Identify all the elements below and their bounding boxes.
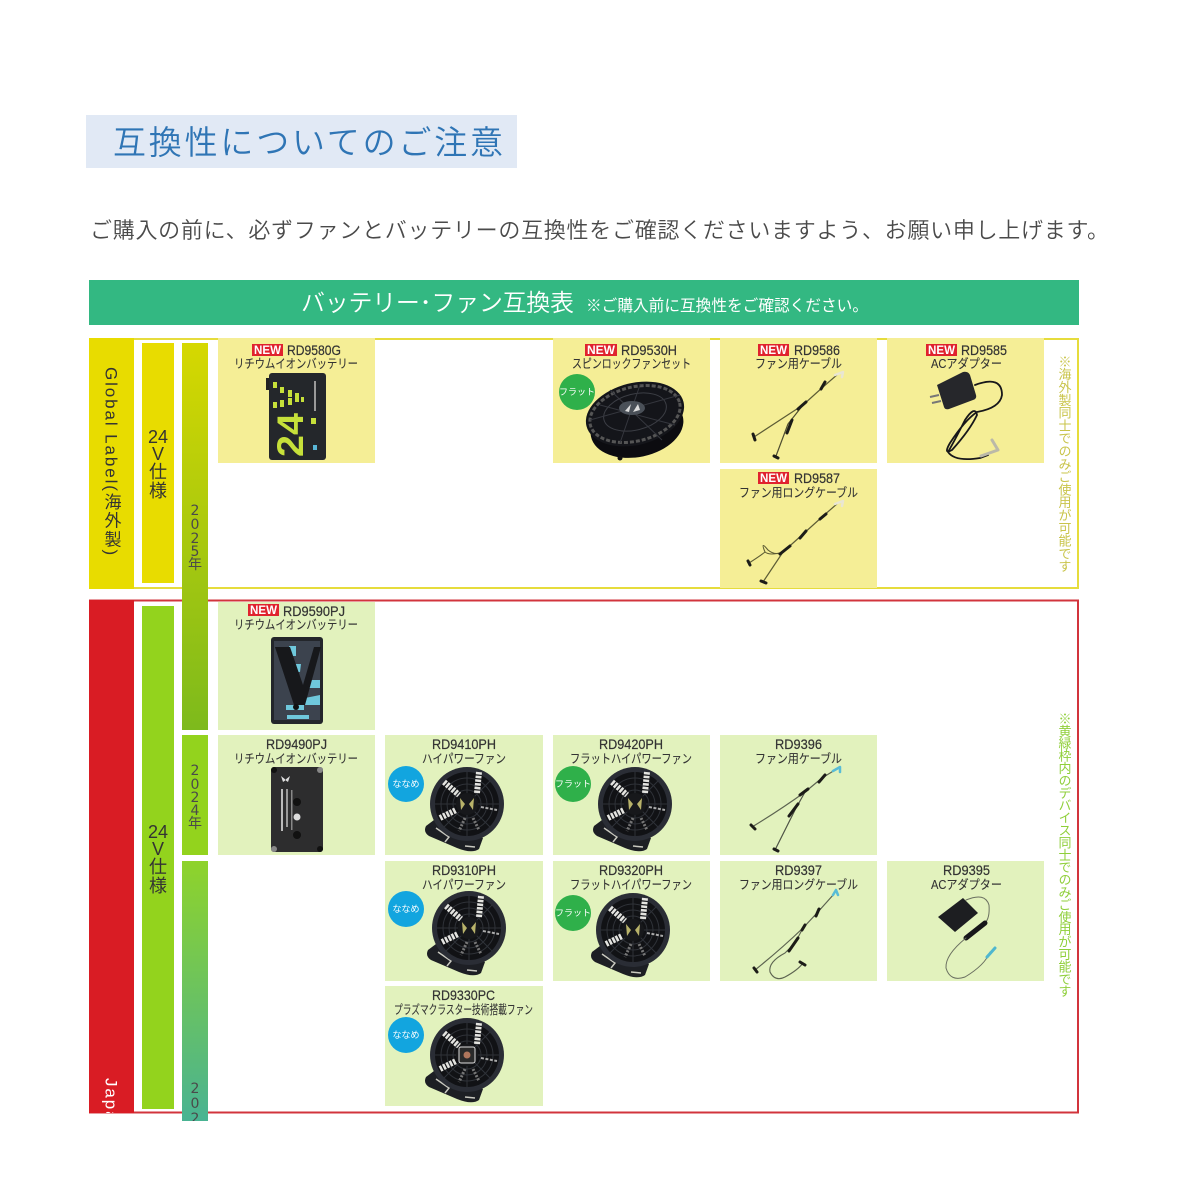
panel: global label frame: Global Label(海外製) — [102, 367, 121, 557]
badge: diagonal: ななめ — [392, 1030, 420, 1040]
icon: long cable — [754, 890, 838, 979]
card: RD9310PH — [385, 861, 543, 981]
card: RD9397 — [720, 861, 877, 981]
card: RD9580G — [218, 338, 375, 463]
icon: long cable — [748, 501, 843, 583]
card: RD9490PJ: RD9490PJ — [266, 736, 327, 752]
card: RD9397: ファン用ロングケーブル — [739, 877, 858, 892]
icon: fan — [425, 767, 504, 851]
card: RD9590PJ: リチウムイオンバッテリー — [234, 618, 358, 632]
card: RD9580G: NEW — [254, 345, 281, 357]
card: RD9395: RD9395 — [943, 862, 990, 878]
card: RD9590PJ: NEW — [250, 605, 277, 617]
card: RD9320PH: RD9320PH — [599, 862, 663, 878]
card: RD9587: RD9587 — [794, 470, 840, 486]
voltage column: global 24V: 仕 — [149, 462, 167, 482]
intro text: ご購入の前に、必ずファンとバッテリーの互換性をご確認くださいますよう、お願い申し上げます。 — [90, 218, 1109, 243]
card: RD9580G: リチウムイオンバッテリー — [234, 357, 358, 371]
card: RD9420PH: RD9420PH — [599, 736, 663, 752]
card: RD9420PH: フラットハイパワーファン — [570, 752, 692, 766]
badge: flat — [555, 766, 591, 802]
card: RD9580G: RD9580G — [287, 342, 341, 358]
badge: flat — [559, 374, 595, 410]
card: RD9310PH: RD9310PH — [432, 862, 496, 878]
card: RD9330PC — [385, 986, 543, 1106]
card: RD9586: RD9586 — [794, 342, 840, 358]
card: RD9585: RD9585 — [961, 342, 1007, 358]
card: RD9396: ファン用ケーブル — [755, 751, 842, 766]
panel: japan label frame: Japan — [102, 1078, 120, 1134]
icon: cable — [753, 372, 843, 458]
card: RD9530H — [553, 338, 710, 466]
icon: battery 24V: 24 — [270, 413, 311, 457]
badge: diagonal: ななめ — [392, 779, 420, 789]
card: RD9330PC: プラズマクラスター技術搭載ファン — [394, 1002, 533, 1017]
card: RD9397: RD9397 — [775, 862, 822, 878]
card: RD9395 — [887, 861, 1044, 981]
badge: flat — [555, 895, 591, 931]
title — [86, 115, 517, 168]
icon: fan — [593, 767, 672, 851]
card: RD9587: NEW — [760, 473, 787, 485]
note: global: ※海外製同士でのみご使用が可能です — [1056, 355, 1072, 573]
badge: diagonal — [388, 891, 424, 927]
year column: 2024: 2024年 — [188, 763, 202, 832]
year column: 2025 — [182, 343, 208, 730]
year column: 2025: 2025年 — [188, 503, 202, 573]
card: RD9530H: NEW — [587, 345, 615, 357]
icon: spin lock fan — [579, 372, 691, 466]
table header: ※ご購入前に互換性をご確認ください。 — [586, 297, 868, 315]
card: RD9320PH: フラットハイパワーファン — [570, 878, 692, 892]
card: RD9585: ACアダプター — [931, 356, 1002, 371]
icon: fan — [591, 893, 670, 977]
card: RD9586: ファン用ケーブル — [755, 356, 842, 371]
card: RD9585 — [887, 338, 1044, 463]
card: RD9410PH: RD9410PH — [432, 736, 496, 752]
card: RD9587: ファン用ロングケーブル — [739, 485, 858, 500]
icon: battery V pattern — [271, 637, 323, 724]
card: RD9586: NEW — [760, 345, 787, 357]
badge: flat: フラット — [555, 779, 591, 789]
icon: AC adapter — [930, 372, 1002, 459]
icon: battery 24V — [266, 373, 326, 460]
voltage column: global 24V: 様 — [149, 481, 167, 501]
card: RD9587 — [720, 469, 877, 588]
card: RD9490PJ — [218, 735, 375, 855]
voltage column: japan 24V: 24 — [148, 822, 168, 842]
voltage column: global 24V: V — [152, 444, 164, 464]
icon: plasmacluster fan — [425, 1018, 504, 1102]
icon: fan — [427, 891, 506, 975]
voltage column: global 24V: 24 — [148, 427, 168, 447]
badge: flat: フラット — [555, 908, 591, 918]
badge: flat: フラット — [559, 387, 595, 397]
panel: global label frame — [89, 338, 1078, 589]
voltage column: japan 24V — [142, 606, 174, 1109]
year column: 2023 — [182, 861, 208, 1121]
card: RD9586 — [720, 338, 877, 463]
voltage column: japan 24V: 様 — [149, 876, 167, 896]
card: RD9530H: RD9530H — [621, 342, 677, 358]
card: RD9490PJ: リチウムイオンバッテリー — [234, 752, 358, 766]
voltage column: global 24V — [142, 343, 174, 583]
card: RD9590PJ: RD9590PJ — [283, 603, 345, 619]
card: RD9395: ACアダプター — [931, 877, 1002, 892]
voltage column: japan 24V: V — [152, 839, 164, 859]
card: RD9590PJ — [218, 602, 375, 730]
table header: バッテリー･ファン互換表 — [301, 290, 574, 317]
card: RD9310PH: ハイパワーファン — [422, 878, 506, 892]
badge: diagonal — [388, 1017, 424, 1053]
card: RD9420PH — [553, 735, 710, 855]
title: 互換性についてのご注意 — [113, 124, 503, 161]
card: RD9410PH — [385, 735, 543, 855]
badge: diagonal — [388, 766, 424, 802]
icon: AC adapter — [938, 897, 995, 978]
icon: cable — [751, 767, 840, 851]
card: RD9396 — [720, 735, 877, 855]
card: RD9320PH — [553, 861, 710, 981]
note: japan: ※黄緑枠内のデバイス同士でのみご使用が可能です — [1056, 712, 1072, 998]
year column: 2024 — [182, 735, 208, 855]
badge: diagonal: ななめ — [392, 904, 420, 914]
card: RD9330PC: RD9330PC — [432, 987, 495, 1003]
card: RD9396: RD9396 — [775, 736, 822, 752]
table header — [89, 280, 1079, 325]
voltage column: japan 24V: 仕 — [149, 857, 167, 877]
card: RD9585: NEW — [928, 345, 955, 357]
icon: battery black — [271, 767, 323, 852]
year column: 2023: 2023年 — [188, 1081, 202, 1155]
card: RD9410PH: ハイパワーファン — [422, 752, 506, 766]
panel: japan label frame — [89, 600, 1078, 1134]
card: RD9530H: スピンロックファンセット — [572, 357, 691, 371]
